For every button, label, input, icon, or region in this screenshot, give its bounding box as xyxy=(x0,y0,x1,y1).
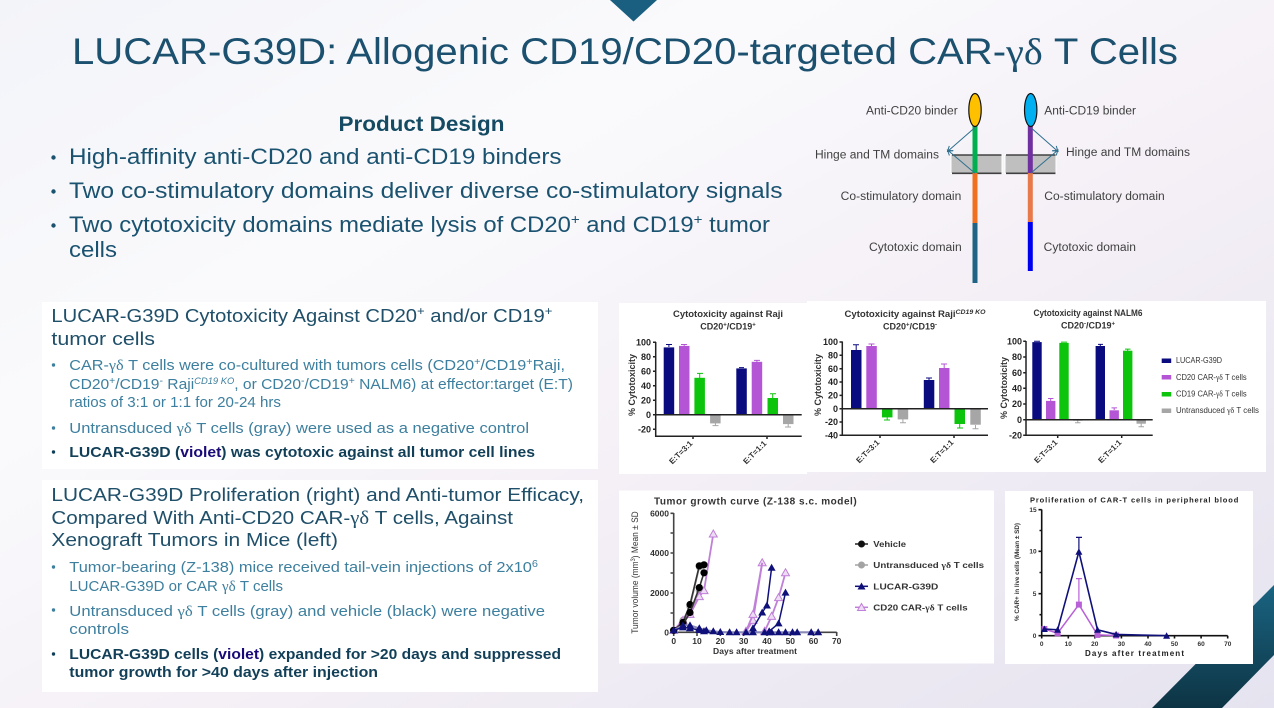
axis labels: Raji CD19 KO: E:T=3:1 xyxy=(854,438,882,465)
axes xyxy=(653,342,802,439)
legend: tumor growth xyxy=(855,539,984,612)
bullet: co-culture xyxy=(52,356,573,411)
axes: NALM6 xyxy=(1023,341,1153,438)
axis labels: 10 xyxy=(1029,548,1037,556)
axis labels: NALM6: 0 xyxy=(1017,415,1022,425)
stem: left construct xyxy=(972,126,978,283)
axis labels: Days after treatment xyxy=(1085,649,1184,658)
diagram labels: Anti-CD20 binder xyxy=(866,106,958,118)
panel: cytotoxicity text xyxy=(42,302,598,469)
heading: cytotoxicity: tumor cells xyxy=(51,328,155,349)
decorative chevron at top xyxy=(610,0,657,22)
bullet: injections: LUCAR-G39D or CAR γδ T cells xyxy=(69,578,283,595)
axis labels: -20 xyxy=(638,424,651,434)
chart title: CD20+/CD19+ xyxy=(700,322,756,332)
bullet: injections: Tumor-bearing (Z-138) mice received tail-vein injections of 2x10 6 xyxy=(69,558,538,576)
bullet: cytotoxicity: cells xyxy=(69,237,117,262)
axis labels: Raji CD19 KO: 60 xyxy=(828,364,838,374)
chart title: Cytotoxicity against Raji xyxy=(673,309,783,319)
diagram labels: Co-stimulatory domain xyxy=(841,191,961,203)
bullet: key finding: LUCAR-G39D cells ( violet) expanded for >20 days and suppressed xyxy=(69,646,561,663)
legend: tumor growth: CD20 CAR- γδ T cells xyxy=(873,602,968,612)
legend: cytotoxicity charts: LUCAR-G39D xyxy=(1176,356,1222,365)
series: LUCAR-G39D xyxy=(674,568,818,632)
axis labels: 80 xyxy=(641,352,651,362)
bars: NALM6 xyxy=(1032,341,1146,427)
axis labels: % CAR+ in live cells (Mean ± SD) xyxy=(1014,523,1021,621)
axis labels xyxy=(1014,507,1232,658)
axis labels: 10 xyxy=(692,636,702,646)
axis labels: NALM6: -20 xyxy=(1009,430,1022,440)
chart title: NALM6: Cytotoxicity against NALM6 xyxy=(1034,308,1142,318)
axis labels: 4000 xyxy=(650,548,669,558)
bullet: negative control: Untransduced γδ T cells (gray) were used as a negative control xyxy=(69,420,529,437)
series: untransduced xyxy=(674,566,702,630)
legend: cytotoxicity charts: Untransduced γδ T cells xyxy=(1176,406,1259,415)
axis labels: NALM6: 80 xyxy=(1012,352,1022,362)
series: LUCAR-G39D xyxy=(1044,537,1167,636)
chart title: Raji CD19 KO: CD20+/CD19- xyxy=(883,322,937,332)
bars: Raji CD19 KO xyxy=(851,344,981,429)
axis labels: 40 xyxy=(762,636,772,646)
heading: proliferation: Compared With Anti-CD20 CAR- γδ T cells, Against xyxy=(51,507,513,529)
axis labels: Raji CD19 KO: -40 xyxy=(825,430,838,440)
axis labels: 40 xyxy=(641,381,651,391)
axis labels: % Cytotoxicity xyxy=(627,354,637,416)
axis labels: 60 xyxy=(809,636,818,646)
axis labels: NALM6 xyxy=(999,336,1124,465)
bullet: negative controls: controls xyxy=(69,621,129,638)
heading: proliferation: Xenograft Tumors in Mice (left) xyxy=(51,529,338,550)
chart title xyxy=(673,309,783,332)
axis labels: NALM6: % Cytotoxicity xyxy=(999,357,1009,419)
diagram labels: Hinge and TM domains xyxy=(1066,147,1190,159)
chart: cytotoxicity against Raji CD19 KO and NALM6 xyxy=(807,301,1266,472)
axis labels: Raji CD19 KO: E:T=1:1 xyxy=(928,438,956,465)
axis labels: 20 xyxy=(716,636,725,646)
bullet: key finding xyxy=(52,646,561,681)
bullet: co-culture: CD20+/CD19- RajiCD19 KO, or CD20 -/CD19+ NALM6) at effector:target (E:T) xyxy=(69,376,573,393)
axis labels: 50 xyxy=(786,636,795,646)
axis labels: 30 xyxy=(1118,641,1125,648)
bullet: key finding: LUCAR-G39D ( violet) was cytotoxic against all tumor cell lines xyxy=(69,444,535,461)
axis labels: NALM6: 40 xyxy=(1012,384,1022,394)
chart: tumor growth curve xyxy=(619,490,994,664)
axis labels: Tumor volume (mm3) Mean ± SD xyxy=(630,511,640,634)
panel: proliferation and efficacy text xyxy=(42,480,598,692)
axis labels: Raji CD19 KO: 40 xyxy=(828,377,838,387)
bullet: key finding: tumor growth for >40 days after injection xyxy=(69,664,378,681)
legend: cytotoxicity charts: CD20 CAR-γδ T cells xyxy=(1176,373,1247,382)
diagram labels: Co-stimulatory domain xyxy=(1044,191,1165,203)
panel: product design text xyxy=(51,113,783,262)
bullet: binders: High-affinity anti-CD20 and anti-CD19 binders xyxy=(69,144,562,169)
axis labels: 5 xyxy=(1033,591,1037,598)
axis labels: Days after treatment xyxy=(713,646,797,656)
diagram labels: Cytotoxic domain xyxy=(869,242,962,254)
axis labels: 15 xyxy=(1029,507,1037,514)
series: CD20 CAR xyxy=(674,534,786,631)
chart: proliferation of CAR-T cells xyxy=(1005,491,1253,664)
chart title: NALM6 xyxy=(1034,308,1142,330)
heading: product design: Product Design xyxy=(338,113,504,136)
bullet: negative controls xyxy=(52,603,545,638)
axis labels: 60 xyxy=(1197,641,1205,648)
axis labels: 100 xyxy=(636,338,651,348)
bullet: cytotoxicity xyxy=(51,211,770,262)
axis labels: NALM6: 60 xyxy=(1012,368,1022,378)
chart title: Raji CD19 KO: Cytotoxicity against Raji CD19 KO xyxy=(844,308,986,319)
axes: Raji CD19 KO xyxy=(840,342,988,438)
axis labels: 30 xyxy=(739,636,749,646)
chart title: Proliferation of CAR-T cells in peripheral blood xyxy=(1030,496,1239,505)
arrows xyxy=(948,128,1058,173)
axis labels: 50 xyxy=(1171,641,1178,648)
axis labels: 70 xyxy=(832,636,842,646)
legend: tumor growth: Untransduced γδ T cells xyxy=(873,560,984,570)
membrane xyxy=(951,154,1056,174)
bullet: cytotoxicity: Two cytotoxicity domains mediate lysis of CD20 + and CD19 + tumor xyxy=(69,211,770,237)
diagram labels: Anti-CD19 binder xyxy=(1044,106,1136,118)
axes xyxy=(1038,510,1228,638)
bullet: injections xyxy=(52,558,538,595)
axis labels: 70 xyxy=(1224,641,1232,648)
legend: cytotoxicity charts: CD19 CAR-γδ T cells xyxy=(1176,390,1247,398)
heading: cytotoxicity xyxy=(51,304,552,349)
series: CD20 CAR xyxy=(1044,579,1116,636)
binder: anti-CD20 xyxy=(969,94,981,126)
axis labels: NALM6: 20 xyxy=(1012,399,1022,409)
stem: right construct xyxy=(1028,126,1033,271)
axis labels: 20 xyxy=(1091,641,1099,648)
legend: tumor growth: LUCAR-G39D xyxy=(873,581,938,591)
corner stripe xyxy=(1152,585,1274,708)
diagram labels xyxy=(815,106,1190,254)
axis labels: 0 xyxy=(1040,641,1044,648)
axis labels xyxy=(630,508,842,656)
axis labels: NALM6: E:T=3:1 xyxy=(1032,438,1060,465)
axis labels: 0 xyxy=(664,628,669,638)
axis labels: 0 xyxy=(646,410,651,420)
chart title: NALM6: CD20-/CD19+ xyxy=(1061,320,1116,330)
axis labels: Raji CD19 KO: 100 xyxy=(823,337,838,347)
axis labels: Raji CD19 KO: 20 xyxy=(828,391,838,401)
binder: anti-CD19 xyxy=(1024,94,1037,126)
axis labels: 10 xyxy=(1065,641,1072,648)
axis labels: 0 xyxy=(671,636,676,646)
axis labels: 20 xyxy=(641,395,651,405)
chart title: Raji CD19 KO xyxy=(844,308,986,332)
legend: cytotoxicity charts xyxy=(1162,356,1259,415)
heading: cytotoxicity: LUCAR-G39D Cytotoxicity Against CD20 + and/or CD19 + xyxy=(51,304,552,326)
diagram labels: Hinge and TM domains xyxy=(815,150,939,162)
axes xyxy=(670,513,837,636)
diagram labels: Cytotoxic domain xyxy=(1044,242,1136,254)
diagram: CAR constructs xyxy=(815,94,1190,283)
axis labels: NALM6: 100 xyxy=(1007,336,1022,346)
bars xyxy=(664,344,794,427)
axis labels: Raji CD19 KO: 0 xyxy=(833,404,838,414)
axis labels: 40 xyxy=(1144,641,1152,648)
bullet: negative controls: Untransduced γδ T cells (gray) and vehicle (black) were negative xyxy=(69,603,545,620)
axis labels: E:T=3:1 xyxy=(667,439,695,466)
axis labels: 0 xyxy=(1033,633,1037,640)
axis labels: NALM6: E:T=1:1 xyxy=(1096,438,1124,465)
axis labels: 6000 xyxy=(650,508,669,518)
legend: tumor growth: Vehicle xyxy=(873,539,906,549)
axis labels: E:T=1:1 xyxy=(741,439,769,466)
axis labels: Raji CD19 KO: -20 xyxy=(825,417,838,427)
title: LUCAR-G39D: Allogenic CD19/CD20-targeted CAR- γδ T Cells xyxy=(72,31,1178,73)
bullet: co-culture: CAR-γδ T cells were co-cultured with tumors cells (CD20 +/CD19 +Raji, xyxy=(69,356,565,374)
axis labels xyxy=(627,338,769,466)
axis labels: Raji CD19 KO xyxy=(813,337,956,465)
bullet: co-stimulatory: Two co-stimulatory domains deliver diverse co-stimulatory signals xyxy=(69,178,782,203)
chart title: Tumor growth curve (Z-138 s.c. model) xyxy=(654,496,857,508)
series: vehicle xyxy=(674,565,704,630)
axis labels: Raji CD19 KO: % Cytotoxicity xyxy=(813,354,823,416)
axis labels: Raji CD19 KO: 80 xyxy=(828,350,838,360)
chart: cytotoxicity against Raji xyxy=(619,303,807,474)
heading: proliferation xyxy=(51,484,584,550)
heading: proliferation: LUCAR-G39D Proliferation (right) and Anti-tumor Efficacy, xyxy=(51,484,584,505)
bullet: co-culture: ratios of 3:1 or 1:1 for 20-24 hrs xyxy=(69,394,281,411)
axis labels: 60 xyxy=(641,366,651,376)
axis labels: 2000 xyxy=(650,588,669,598)
